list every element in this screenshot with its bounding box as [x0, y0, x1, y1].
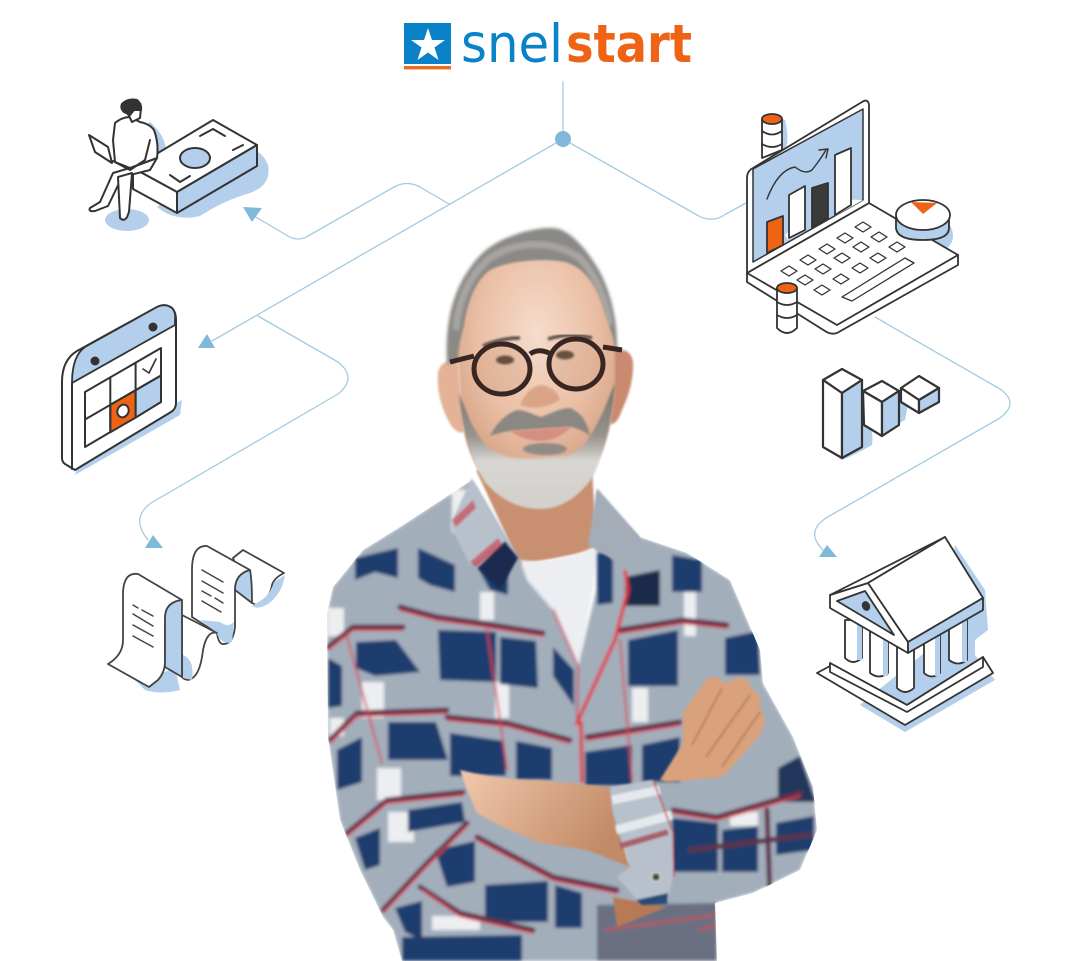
glasses [450, 339, 622, 394]
hand [660, 677, 764, 782]
eyes [496, 350, 574, 364]
t-shirt [520, 545, 597, 667]
arrow: to bank icon [819, 545, 837, 557]
beard [459, 383, 615, 509]
soul patch [523, 443, 567, 455]
connector hub dot [555, 131, 571, 147]
face [458, 260, 615, 507]
icon: laptop with chart [747, 101, 958, 334]
shirt cuff [610, 780, 674, 905]
collar [450, 478, 640, 590]
arrow: to receipts icon [145, 535, 163, 548]
head [438, 228, 633, 509]
plaid shirt [327, 480, 817, 961]
hair [447, 228, 617, 364]
neck [476, 470, 597, 565]
icon: person with laptop on money [89, 100, 269, 231]
arrow: to money icon [243, 207, 262, 222]
photo: man with crossed arms [327, 228, 817, 961]
eyebrows [483, 335, 592, 346]
logo: snelstart [404, 14, 692, 75]
connector lines [140, 82, 1010, 550]
right ear [610, 350, 633, 424]
shirt placket [577, 570, 628, 783]
logo: snelstart: snel [461, 14, 563, 75]
nose [520, 385, 560, 408]
forearm [460, 770, 630, 867]
left ear [438, 361, 464, 432]
icon: bank building [817, 537, 995, 732]
icon: bar blocks [823, 369, 939, 460]
arrow: to calendar icon [198, 334, 215, 348]
lower skin under cuff [613, 897, 667, 927]
moustache [490, 408, 590, 436]
icon: calendar [62, 305, 182, 475]
icon: receipts [108, 546, 285, 692]
logo: snelstart: start [566, 14, 692, 75]
lips [510, 427, 572, 441]
